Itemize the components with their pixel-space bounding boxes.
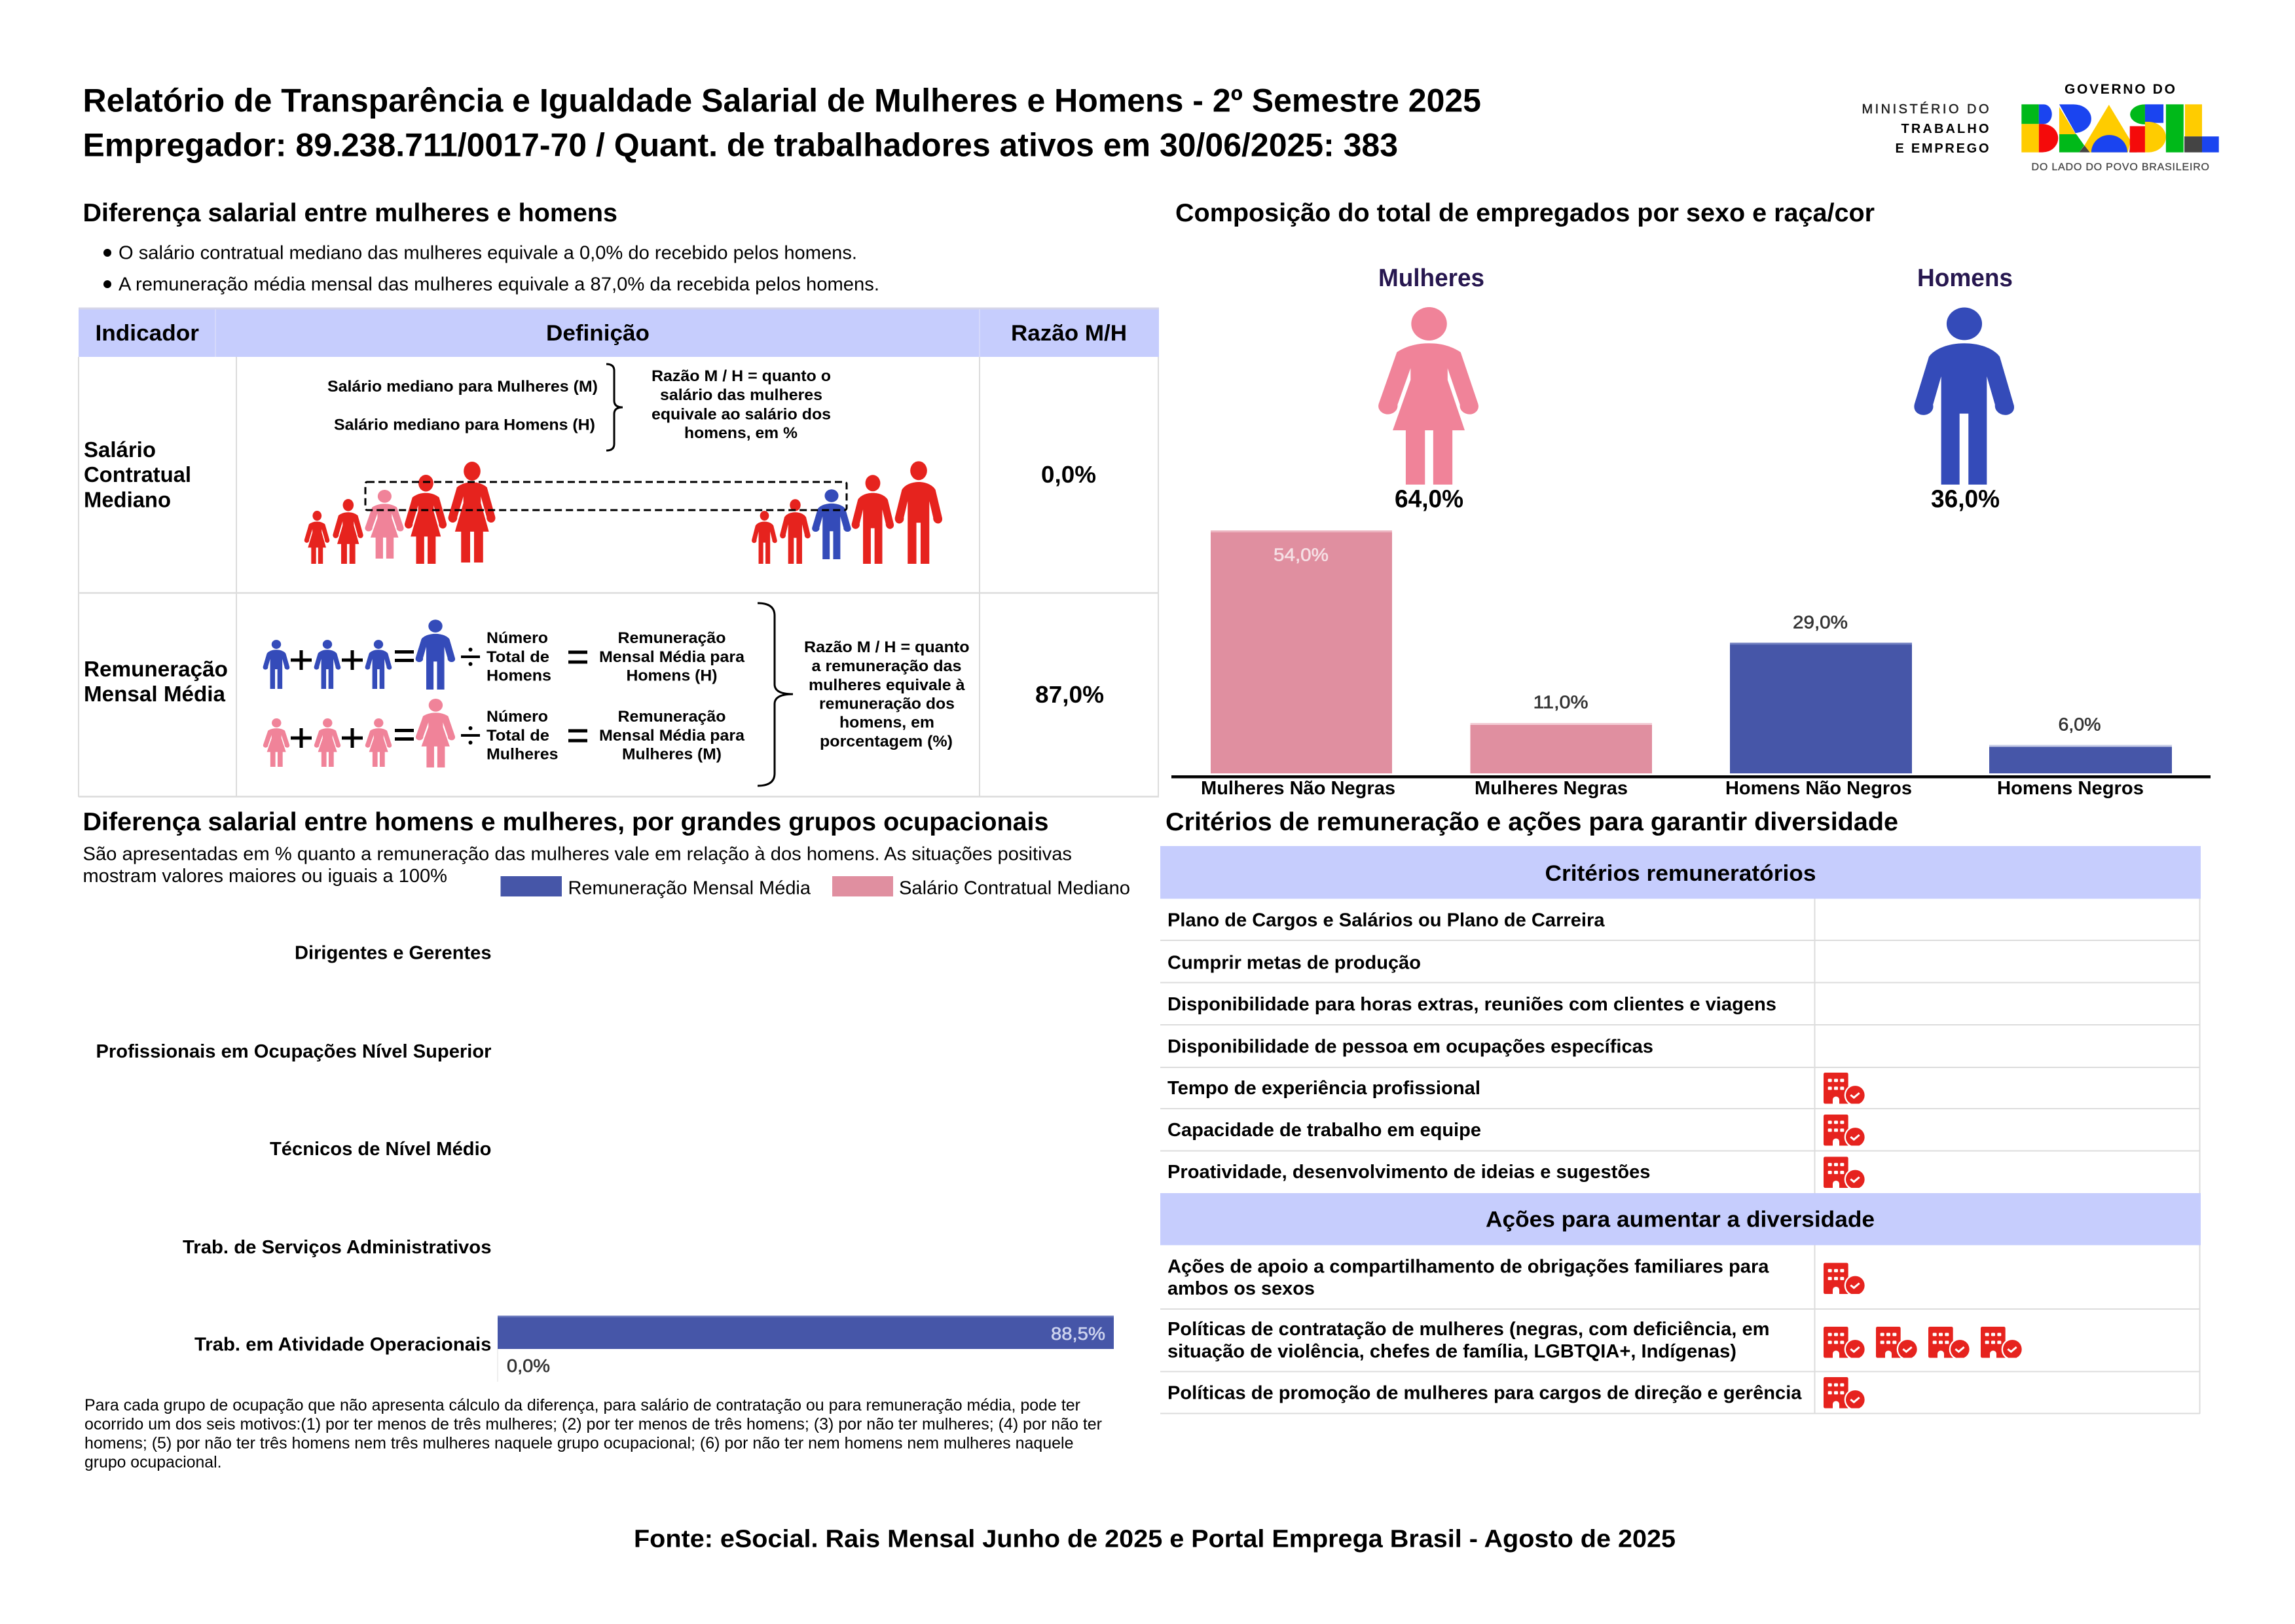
formula: men bbox=[263, 619, 744, 690]
formula: men: Homens (H) bbox=[626, 667, 718, 685]
formula: men: Número bbox=[487, 629, 548, 647]
panel: men share bbox=[1914, 265, 2014, 513]
criteria rows: Disponibilidade para horas extras, reuniões com clientes e viagens bbox=[1167, 994, 1776, 1015]
footnote: Para cada grupo de ocupação que não apresenta cálculo da diferença, para salário de contratação ou para remuneração média, pode ter bbox=[84, 1396, 1080, 1414]
action rows: Políticas de promoção de mulheres para cargos de direção e gerência bbox=[1167, 1383, 1802, 1404]
panel: indicator table bbox=[79, 308, 1159, 797]
footnote: homens; (5) por não ter três homens nem três mulheres naquele grupo ocupacional; (6) por não ter nem homens nem mulheres naquele bbox=[84, 1434, 1074, 1452]
table header bbox=[79, 308, 1159, 357]
panel: women share: 64,0% bbox=[1395, 486, 1463, 513]
header: criteria bbox=[1160, 846, 2201, 898]
source footer: Fonte: eSocial. Rais Mensal Junho de 2025 e Portal Emprega Brasil - Agosto de 2025 bbox=[634, 1526, 1676, 1553]
criteria rows: Disponibilidade de pessoa em ocupações específicas bbox=[1167, 1036, 1653, 1057]
title: Empregador: 89.238.711/0017-70 / Quant. de trabalhadores ativos em 30/06/2025: 383 bbox=[83, 127, 1398, 164]
footnote: grupo ocupacional. bbox=[84, 1453, 221, 1471]
row: remuneração mensal média bbox=[84, 603, 1104, 786]
ratio explanation: Razão M / H = quanto bbox=[804, 638, 970, 656]
formula: men: Total de bbox=[487, 648, 549, 666]
criteria rows: Tempo de experiência profissional bbox=[1167, 1078, 1480, 1099]
panel: criteria table bbox=[1160, 846, 2201, 1414]
ratio explanation: mulheres equivale à bbox=[809, 676, 965, 694]
bullet list: O salário contratual mediano das mulheres equivale a 0,0% do recebido pelos homens. bbox=[119, 242, 857, 263]
logo: Governo do Brasil: DO LADO DO POVO BRASILEIRO bbox=[2031, 162, 2209, 173]
bar chart: occupational groups: Trab. de Serviços Administrativos bbox=[183, 1237, 491, 1258]
icon: company check bbox=[1824, 1263, 1866, 1297]
formula: men: Mensal Média para bbox=[599, 648, 744, 666]
heading: occupational groups: Diferença salarial entre homens e mulheres, por grandes grupos ocupacionais bbox=[83, 808, 1049, 836]
formula: women: Número bbox=[487, 708, 548, 726]
legend bbox=[500, 876, 1130, 898]
definition labels: equivale ao salário dos bbox=[652, 406, 831, 423]
ratio explanation: homens, em bbox=[839, 714, 934, 731]
logo: Ministério do Trabalho e Emprego: TRABALHO bbox=[1901, 122, 1989, 136]
action rows: ambos os sexos bbox=[1167, 1278, 1315, 1299]
title bbox=[83, 83, 1481, 164]
panel: women share bbox=[1378, 265, 1484, 513]
definition labels: Razão M / H = quanto o bbox=[652, 367, 831, 385]
action rows bbox=[1167, 1256, 1802, 1404]
formula: men: Homens bbox=[487, 667, 551, 685]
formula: women: Mensal Média para bbox=[599, 727, 744, 745]
action rows: Políticas de contratação de mulheres (negras, com deficiência, em bbox=[1167, 1319, 1769, 1340]
bar chart: occupational groups bbox=[96, 943, 1114, 1382]
formula: women: Mulheres bbox=[487, 745, 558, 764]
bar chart: composition by race: Mulheres Negras bbox=[1475, 778, 1628, 799]
row: salário contratual mediano bbox=[84, 364, 1096, 564]
bar chart: composition by race: 54,0% bbox=[1274, 545, 1329, 564]
legend: Salário Contratual Mediano bbox=[899, 877, 1130, 898]
row: salário contratual mediano: Salário bbox=[84, 437, 156, 462]
table header: Definição bbox=[546, 321, 650, 346]
row: remuneração mensal média: Mensal Média bbox=[84, 682, 226, 706]
row: remuneração mensal média: 87,0% bbox=[1035, 681, 1104, 708]
footnote bbox=[84, 1396, 1102, 1471]
median dashed box bbox=[365, 482, 847, 510]
bar chart: occupational groups: Trab. em Atividade Operacionais bbox=[194, 1335, 491, 1356]
bar chart: composition by race: 29,0% bbox=[1793, 612, 1848, 633]
title: Relatório de Transparência e Igualdade Salarial de Mulheres e Homens - 2º Semestre 2025 bbox=[83, 83, 1481, 119]
heading: salary difference: Diferença salarial entre mulheres e homens bbox=[83, 199, 617, 227]
bar chart: composition by race: Homens Negros bbox=[1997, 778, 2144, 799]
icon: company check bbox=[1824, 1115, 1866, 1148]
legend: Remuneração Mensal Média bbox=[568, 877, 811, 898]
row: salário contratual mediano: Mediano bbox=[84, 487, 171, 512]
bar chart: composition by race: Mulheres Não Negras bbox=[1201, 778, 1395, 799]
intro text: mostram valores maiores ou iguais a 100% bbox=[83, 866, 447, 887]
action rows: Ações de apoio a compartilhamento de obrigações familiares para bbox=[1167, 1256, 1769, 1277]
icons: company check x4 bbox=[1824, 1327, 2023, 1360]
table header: Indicador bbox=[96, 321, 199, 346]
bar chart: occupational groups: 88,5% bbox=[1051, 1323, 1105, 1344]
bar chart: occupational groups: 0,0% bbox=[507, 1356, 550, 1376]
definition labels bbox=[327, 364, 831, 451]
bar chart: composition by race: Homens Não Negros bbox=[1725, 778, 1912, 799]
table grid bbox=[1160, 898, 2200, 1414]
icon: company check bbox=[1824, 1073, 1866, 1106]
definition labels: Salário mediano para Mulheres (M) bbox=[327, 378, 598, 396]
action rows: situação de violência, chefes de família, LGBTQIA+, Indígenas) bbox=[1167, 1341, 1736, 1362]
definition labels: salário das mulheres bbox=[660, 386, 822, 404]
logo graphic: Brasil bbox=[2021, 104, 2219, 153]
panel: women share: Mulheres bbox=[1378, 265, 1484, 292]
ratio explanation: porcentagem (%) bbox=[820, 733, 953, 750]
ratio explanation bbox=[804, 638, 970, 750]
bullet list: A remuneração média mensal das mulheres equivale a 87,0% da recebida pelos homens. bbox=[119, 274, 879, 295]
criteria rows: Proatividade, desenvolvimento de ideias e sugestões bbox=[1167, 1162, 1650, 1183]
logo: Ministério do Trabalho e Emprego: E EMPREGO bbox=[1895, 141, 1989, 156]
heading: criteria: Critérios de remuneração e ações para garantir diversidade bbox=[1166, 808, 1898, 836]
definition labels: Salário mediano para Homens (H) bbox=[334, 416, 595, 434]
footnote: ocorrido um dos seis motivos:(1) por ter menos de três mulheres; (2) por ter menos de três homens; (3) por não ter mulheres; (4) por não ter bbox=[84, 1415, 1102, 1433]
criteria rows: Capacidade de trabalho em equipe bbox=[1167, 1120, 1481, 1141]
formula: women bbox=[263, 699, 744, 767]
formula: women: Remuneração bbox=[618, 708, 726, 726]
panel: men share: 36,0% bbox=[1931, 486, 2000, 513]
header: actions: Ações para aumentar a diversidade bbox=[1486, 1208, 1875, 1232]
bar chart: occupational groups: Dirigentes e Gerentes bbox=[295, 943, 491, 964]
bar chart: composition by race: 6,0% bbox=[2059, 714, 2101, 735]
header: actions bbox=[1160, 1193, 2201, 1246]
formula: men: Remuneração bbox=[618, 629, 726, 647]
header: criteria: Critérios remuneratórios bbox=[1545, 861, 1816, 886]
table header: Razão M/H bbox=[1011, 321, 1127, 346]
bar chart: composition by race bbox=[1171, 530, 2211, 799]
panel: men share: Homens bbox=[1917, 265, 2013, 292]
icon: women line-up bbox=[304, 462, 496, 564]
bar chart: occupational groups: Técnicos de Nível Médio bbox=[270, 1139, 491, 1160]
bullet list bbox=[103, 242, 879, 295]
logo: Governo do Brasil: GOVERNO DO bbox=[2065, 82, 2175, 97]
intro text bbox=[83, 843, 1072, 887]
logo: Governo do Brasil bbox=[2021, 82, 2219, 173]
ratio explanation: a remuneração das bbox=[812, 657, 961, 675]
criteria rows: Plano de Cargos e Salários ou Plano de Carreira bbox=[1167, 910, 1605, 931]
definition labels: homens, em % bbox=[684, 424, 798, 442]
row: remuneração mensal média: Remuneração bbox=[84, 657, 228, 681]
icon: men line-up bbox=[752, 461, 942, 564]
icon: company check bbox=[1824, 1377, 1866, 1411]
intro text: São apresentadas em % quanto a remuneração das mulheres vale em relação à dos homens. As situações positivas bbox=[83, 843, 1072, 864]
row: salário contratual mediano: Contratual bbox=[84, 462, 191, 487]
bar chart: composition by race: 11,0% bbox=[1533, 692, 1588, 712]
logo: Ministério do Trabalho e Emprego: MINISTÉRIO DO bbox=[1862, 101, 1989, 117]
criteria rows: Cumprir metas de produção bbox=[1167, 952, 1421, 973]
row: salário contratual mediano: 0,0% bbox=[1041, 461, 1096, 488]
heading: composition: Composição do total de empregados por sexo e raça/cor bbox=[1175, 199, 1875, 227]
criteria rows bbox=[1167, 910, 1776, 1183]
formula: women: Mulheres (M) bbox=[622, 745, 722, 764]
brace bbox=[758, 603, 793, 786]
formula: women: Total de bbox=[487, 727, 549, 745]
bar chart: occupational groups: Profissionais em Ocupações Nível Superior bbox=[96, 1041, 491, 1062]
ratio explanation: remuneração dos bbox=[819, 695, 955, 712]
logo: Ministério do Trabalho e Emprego bbox=[1862, 101, 1989, 156]
icon: company check bbox=[1824, 1156, 1866, 1190]
